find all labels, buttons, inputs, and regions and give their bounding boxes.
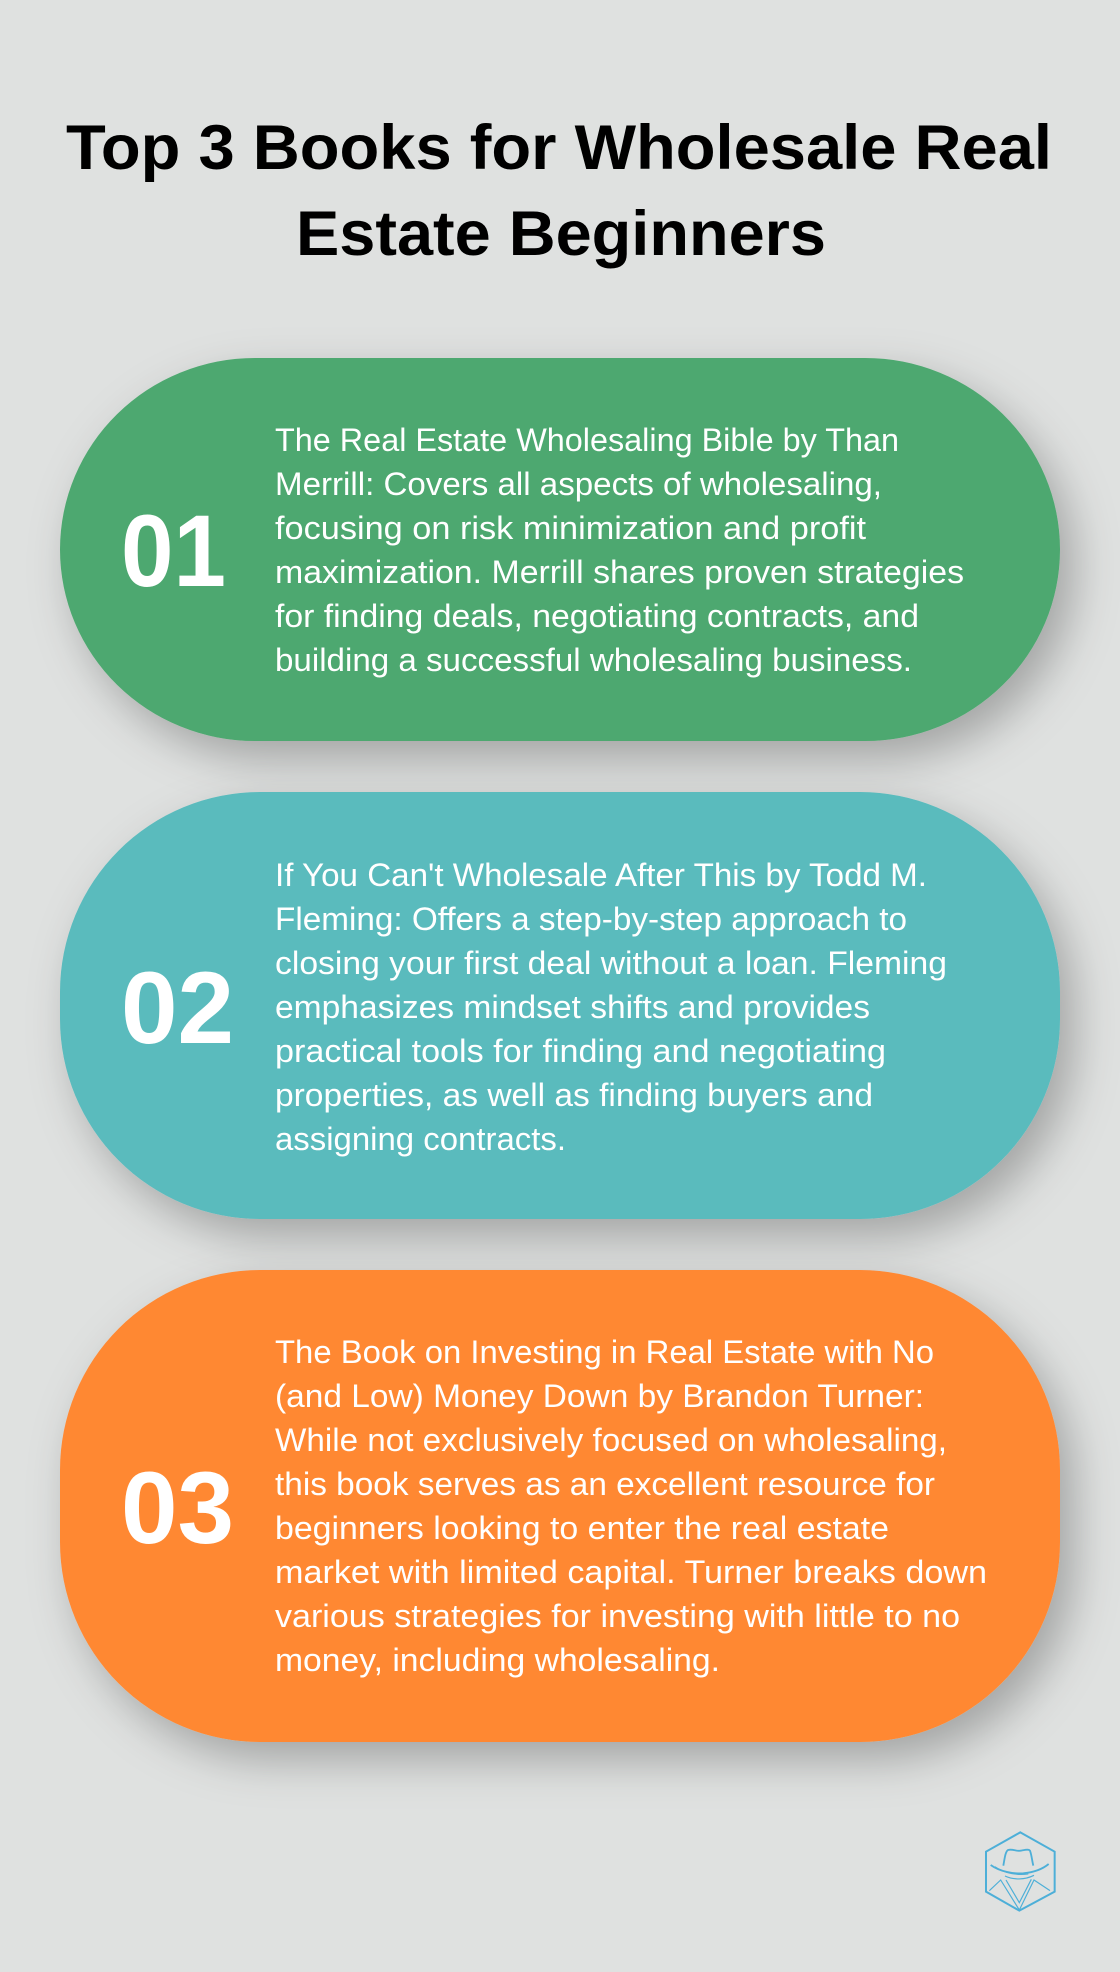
text: book 01 description <box>275 422 964 678</box>
text: book 03 description: money, including wholesaling. <box>275 1642 720 1678</box>
text: book 02 description <box>275 857 947 1157</box>
text: book 03 description: The Book on Investing in Real Estate with No <box>275 1334 934 1370</box>
text: book 03 description: beginners looking to enter the real estate <box>275 1510 889 1546</box>
title: Top 3 Books for Wholesale Real <box>66 113 1052 183</box>
text: book 02 description: closing your first deal without a loan. Fleming <box>275 945 947 981</box>
text: book 01 description: for finding deals, negotiating contracts, and <box>275 598 919 634</box>
pill background: teal <box>60 792 1060 1219</box>
text: book 03 description: market with limited capital. Turner breaks down <box>275 1554 987 1590</box>
panel: book 03 <box>60 1270 1060 1742</box>
text: book 02 description: practical tools for finding and negotiating <box>275 1033 886 1069</box>
text: book 01 description: focusing on risk minimization and profit <box>275 510 866 546</box>
number 02: 02 <box>121 951 234 1065</box>
title <box>66 113 1052 269</box>
text: book 02 description: emphasizes mindset shifts and provides <box>275 989 870 1025</box>
text: book 01 description: building a successful wholesaling business. <box>275 642 912 678</box>
pill background: orange <box>60 1270 1060 1742</box>
text: book 02 description: properties, as well as finding buyers and <box>275 1077 873 1113</box>
text: book 01 description: The Real Estate Wholesaling Bible by Than <box>275 422 899 458</box>
text: book 03 description: While not exclusively focused on wholesaling, <box>275 1422 947 1458</box>
panel: book 01 <box>60 358 1060 741</box>
text: book 01 description: maximization. Merrill shares proven strategies <box>275 554 964 590</box>
number 03: 03 <box>121 1451 234 1565</box>
text: book 03 description: this book serves as an excellent resource for <box>275 1466 935 1502</box>
panel: book 02 <box>60 792 1060 1219</box>
text: book 02 description: If You Can't Wholesale After This by Todd M. <box>275 857 927 893</box>
text: book 02 description: assigning contracts. <box>275 1121 566 1157</box>
text: book 03 description <box>275 1334 987 1678</box>
text: book 03 description: various strategies for investing with little to no <box>275 1598 960 1634</box>
number 01: 01 <box>121 494 226 608</box>
pill background: green <box>60 358 1060 741</box>
text: book 03 description: (and Low) Money Down by Brandon Turner: <box>275 1378 924 1414</box>
icon: hexagon logo with hat and spy <box>986 1832 1055 1911</box>
text: book 01 description: Merrill: Covers all aspects of wholesaling, <box>275 466 882 502</box>
text: book 02 description: Fleming: Offers a step-by-step approach to <box>275 901 907 937</box>
title: Estate Beginners <box>296 199 826 269</box>
